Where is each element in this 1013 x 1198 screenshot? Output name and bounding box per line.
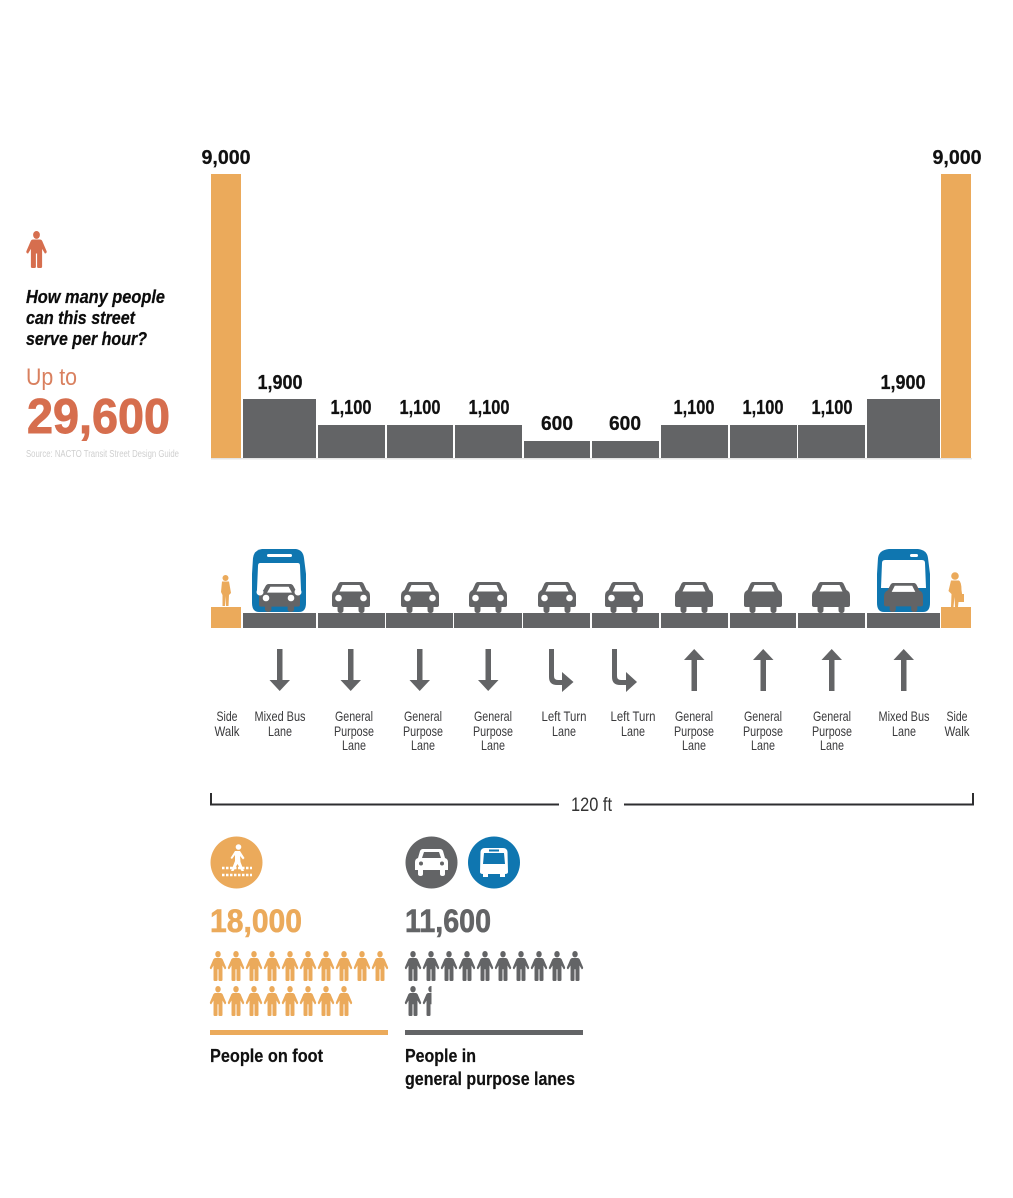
lane labels: Lane (892, 723, 916, 739)
lane labels: Left Turn (610, 708, 656, 724)
lane labels: Purpose (674, 723, 714, 739)
icon: person (26, 231, 47, 268)
lane labels: Lane (751, 737, 775, 753)
bar chart: capacity per lane: 1,900 (258, 372, 302, 394)
right sidewalk (941, 607, 971, 628)
heading: how many people: serve per hour? (26, 329, 147, 349)
icon: left bus (252, 549, 306, 612)
lane labels: General (675, 708, 713, 724)
total: 29,600: 29,600 (27, 390, 170, 444)
icon: car circle (406, 836, 458, 888)
bar chart: capacity per lane: 9,000 (202, 147, 250, 169)
bar chart: capacity per lane: 1,100 (400, 397, 440, 419)
left sidewalk (211, 607, 241, 628)
lane labels: Walk (944, 723, 970, 739)
lane labels: Purpose (812, 723, 852, 739)
lane labels: Lane (268, 723, 292, 739)
bar chart: capacity per lane: 1,900 (880, 372, 926, 394)
lane labels: Mixed Bus (254, 708, 306, 724)
icons: cars facing traffic (332, 582, 850, 613)
lane labels: Lane (552, 723, 576, 739)
number: 18,000: 18,000 (210, 903, 302, 939)
number: 11,600: 11,600 (405, 903, 491, 939)
bar chart: capacity per lane: 1,100 (330, 397, 372, 419)
icon: pedestrian on crosswalk (210, 836, 262, 888)
caption (405, 1045, 575, 1089)
bar chart: capacity per lane (202, 147, 982, 460)
lane labels: General (474, 708, 512, 724)
lane labels: Side (216, 708, 238, 724)
lane labels: Lane (820, 737, 844, 753)
lane labels: General (813, 708, 851, 724)
bar chart: capacity per lane: 1,100 (742, 397, 784, 419)
lane labels: Lane (342, 737, 366, 753)
text: up to: Up to (26, 364, 77, 391)
icon: right bus (877, 549, 930, 612)
caption: People in (405, 1045, 476, 1066)
lane labels: General (744, 708, 782, 724)
lane labels: Left Turn (542, 708, 586, 724)
lane labels: Purpose (403, 723, 443, 739)
panel: people in general purpose lanes (405, 836, 583, 1089)
road lanes (243, 613, 940, 628)
lane labels: Mixed Bus (878, 708, 930, 724)
lane labels: General (404, 708, 442, 724)
lane labels: Lane (481, 737, 505, 753)
lane labels (214, 708, 970, 753)
heading: how many people: can this street (26, 308, 136, 328)
bar chart: capacity per lane: 1,100 (674, 397, 714, 419)
lane labels: Side (946, 708, 968, 724)
heading: how many people: How many people (26, 287, 165, 307)
lane labels: Purpose (334, 723, 374, 739)
heading: how many people (26, 287, 165, 349)
bar chart: capacity per lane: 600 (541, 413, 573, 435)
lane labels: Lane (411, 737, 435, 753)
bar chart: capacity per lane: 600 (609, 413, 641, 435)
pictogram: grey people (405, 951, 583, 1016)
rule (210, 1030, 388, 1035)
lane labels: General (335, 708, 373, 724)
rule (405, 1030, 583, 1035)
icon: pedestrian right with briefcase (948, 572, 964, 607)
pictogram: orange people (210, 951, 388, 1016)
lane labels: Purpose (743, 723, 783, 739)
caption: general purpose lanes (405, 1068, 575, 1089)
bar chart: capacity per lane: 1,100 (468, 397, 510, 419)
dimension bracket: 120 ft: 120 ft (571, 795, 613, 816)
lane labels: Lane (682, 737, 706, 753)
lane labels: Lane (621, 723, 645, 739)
lane labels: Purpose (473, 723, 513, 739)
lane labels: Walk (214, 723, 240, 739)
caption: People on foot (210, 1045, 323, 1066)
street cross-section (211, 549, 971, 628)
arrows: lane direction (270, 649, 914, 692)
bar chart: capacity per lane: 9,000 (932, 147, 982, 169)
icon: bus circle (468, 836, 520, 888)
panel: people on foot (210, 836, 388, 1066)
dimension bracket: 120 ft (211, 793, 973, 816)
icon: pedestrian left (221, 575, 231, 606)
bar chart: capacity per lane: 1,100 (812, 397, 852, 419)
source note: Source: NACTO Transit Street Design Guide (26, 449, 179, 460)
